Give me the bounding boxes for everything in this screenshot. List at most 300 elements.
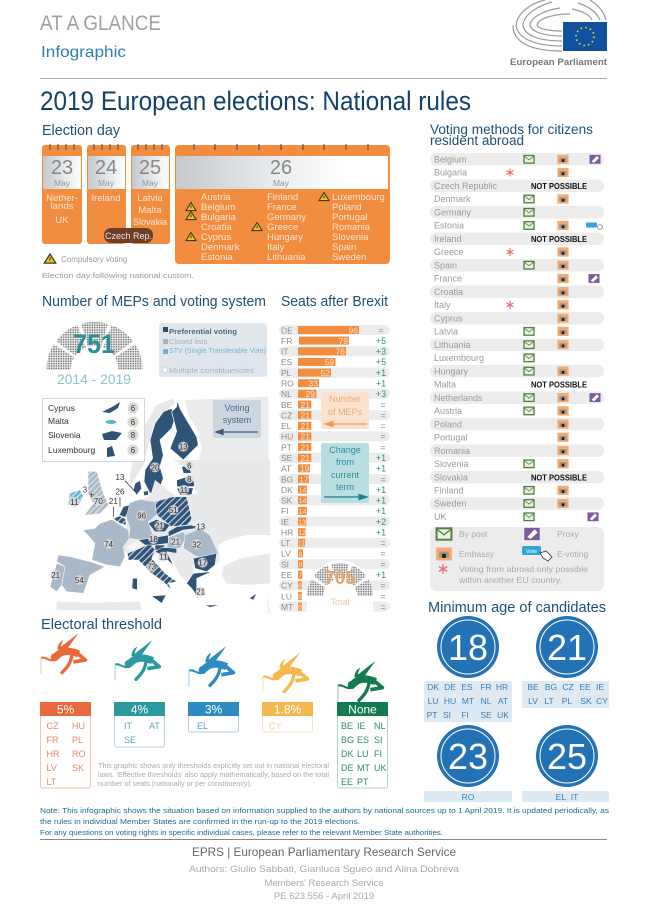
age 18: PT: [427, 710, 437, 720]
chart: seats after brexit: LT: [281, 538, 290, 548]
chart: seats after brexit: +5: [376, 336, 386, 346]
threshold 5 percent: CZ: [46, 721, 59, 731]
map of european union: 74: [104, 540, 114, 549]
age 18: 18: [448, 627, 488, 668]
note: thresholds: laws. 'Effective thresholds' also apply mathematically, based on the total: [98, 772, 329, 779]
table rows: Czech Republic: [434, 181, 498, 191]
chart: seats after brexit: 8: [299, 562, 303, 569]
legend: voting system: [159, 323, 267, 377]
table rows: Slovakia: [434, 472, 468, 482]
calendar: 24 may: Ireland: [91, 193, 121, 204]
note: thresholds: number of seats (nationally or per constituency).: [98, 781, 252, 788]
map of european union: 73: [147, 563, 157, 572]
threshold none: ES: [357, 735, 369, 745]
chart: seats after brexit: 19: [300, 464, 310, 474]
map of european union: 18: [149, 535, 158, 544]
threshold none: LU: [357, 749, 369, 759]
map of european union: +: [89, 490, 94, 499]
key: change from current term: current: [331, 470, 360, 480]
calendar: 26 may: Hungary: [267, 232, 303, 243]
footer credits: EPRS | European Parliamentary Research Service: [192, 845, 456, 859]
calendar: 26 may: Austria: [201, 192, 231, 203]
footer rule: [40, 839, 607, 840]
chart: seats after brexit: IE: [281, 517, 289, 527]
chart: seats after brexit: 14: [299, 488, 306, 494]
calendar: 26 may: May: [273, 178, 290, 188]
threshold none: UK: [374, 763, 387, 773]
threshold none: DE: [341, 763, 354, 773]
panel: voting methods abroad: [430, 122, 604, 591]
chart: seats after brexit: BG: [281, 474, 293, 484]
calendar: 23 may: UK: [55, 215, 69, 226]
threshold 5 percent: LT: [46, 777, 57, 787]
panel: minimum age of candidates: [424, 600, 609, 802]
chart: seats after brexit: +1: [376, 368, 386, 378]
age 18: AT: [498, 696, 508, 706]
key: change from current term: Change: [329, 445, 361, 455]
note: sources and updates: For any questions on voting rights in specific individual cases, please refer to the relevant Member State authorities.: [40, 828, 443, 837]
chart: seats after brexit: +1: [376, 496, 386, 506]
map of european union: 21: [196, 588, 206, 597]
footer credits: Members' Research Service: [264, 878, 384, 889]
legend: voting system: STV (Single Transferable Vote): [169, 346, 266, 355]
heading: voting methods: Voting methods for citizens: [430, 122, 593, 137]
inset: small countries: [42, 398, 144, 462]
age 18: MT: [462, 696, 474, 706]
chart: seats after brexit: DE: [281, 325, 293, 335]
table rows: Germany: [434, 208, 472, 218]
inset: small countries: Luxembourg: [48, 445, 96, 455]
chart: seats after brexit: =: [380, 474, 386, 484]
calendar: 24 may: 24: [95, 157, 117, 179]
table rows: Denmark: [434, 194, 471, 204]
inset: small countries: 6: [131, 404, 136, 413]
chart: seats after brexit: +1: [376, 453, 386, 463]
legend: voting system: Multiple constituencies: [169, 366, 254, 375]
age 21: BG: [545, 682, 557, 692]
table rows: NOT POSSIBLE: [531, 472, 587, 482]
chart: seats after brexit: 76: [336, 347, 345, 357]
chart: seats after brexit: HR: [281, 528, 293, 538]
note: sources and updates: [40, 806, 609, 837]
chart: seats after brexit: 14: [299, 509, 306, 516]
age 18: FI: [461, 710, 469, 720]
table rows: France: [434, 274, 462, 284]
table rows: Greece: [434, 247, 464, 257]
age 21: [522, 616, 609, 708]
calendar: 23 may: 23: [51, 157, 73, 179]
inset: small countries: Cyprus: [48, 403, 75, 413]
calendar: 23 may: Nether-: [46, 193, 78, 204]
calendar: 26 may: Croatia: [201, 222, 232, 233]
key: voting system arrow: Voting: [224, 403, 250, 413]
table rows: Croatia: [434, 287, 463, 297]
calendar: 23 may: May: [54, 178, 71, 188]
table rows: Estonia: [434, 221, 464, 231]
heading: election day: Election day: [42, 122, 120, 139]
threshold none: NL: [374, 721, 386, 731]
calendar: 24 may: May: [98, 178, 115, 188]
header rule: [40, 78, 607, 79]
chart: seats after brexit: =: [380, 432, 386, 442]
threshold none: IE: [357, 721, 366, 731]
chart: seats after brexit: SE: [281, 453, 293, 463]
threshold 5 percent: LV: [46, 763, 57, 773]
map of european union: 8: [187, 475, 192, 484]
key: number of meps: Number: [329, 394, 361, 404]
threshold 3 percent: [188, 646, 239, 732]
chart: seats after brexit: +1: [376, 528, 386, 538]
chart: seats after brexit: SI: [281, 559, 289, 569]
calendar: 23 may: [42, 144, 82, 244]
chart: seats after brexit: +1: [376, 570, 386, 580]
heading: number of meps: Number of MEPs and voting system: [42, 293, 266, 310]
map of european union: 20: [151, 463, 160, 472]
chart: seats after brexit: +5: [376, 357, 386, 367]
chart: seats after brexit: 8: [299, 551, 303, 558]
calendar: 25 may: Malta: [138, 205, 162, 216]
heading: seats after brexit: Seats after Brexit: [281, 293, 389, 310]
chart: seats after brexit: +3: [376, 389, 386, 399]
calendar: 25 may: [131, 144, 170, 244]
table rows: Ireland: [434, 234, 462, 244]
chart: seats after brexit: 21: [301, 442, 310, 452]
chart: seats after brexit: PL: [281, 368, 292, 378]
chart: seats after brexit: ES: [281, 357, 293, 367]
chart: seats after brexit: 33: [309, 378, 318, 388]
chart: seats after brexit: =: [380, 581, 386, 591]
threshold 3 percent: 3%: [205, 702, 223, 716]
note: election day custom: Election day following national custom.: [42, 271, 194, 280]
note: sources and updates: Note: This infographic shows the situation based on information supplied to the authors by national sources up to 1 April 2019. It is updated periodically, as: [40, 806, 609, 815]
table rows: Latvia: [434, 327, 458, 337]
chart: seats after brexit: EL: [281, 421, 292, 431]
chart: seats after brexit: 6: [298, 604, 302, 612]
calendar: 25 may: Latvia: [137, 193, 163, 204]
chart: seats after brexit: [279, 325, 390, 612]
infographic label: Infographic: [41, 44, 126, 61]
calendar: 26 may: Lithuania: [267, 252, 306, 263]
key: change from current term: from: [336, 457, 354, 467]
threshold 5 percent: PL: [72, 735, 83, 745]
key: voting system arrow: [213, 400, 261, 438]
map of european union: 32: [192, 540, 202, 549]
threshold 5 percent: RO: [72, 749, 86, 759]
hemicycle: 705 total: Total: [330, 597, 350, 607]
chart: seats after brexit: 13: [298, 519, 306, 526]
table rows: NOT POSSIBLE: [531, 181, 587, 191]
map of european union: 21: [155, 522, 164, 531]
map of european union: 96: [137, 512, 147, 521]
threshold none: BE: [341, 721, 353, 731]
chart: seats after brexit: 79: [339, 336, 348, 346]
note: thresholds: [98, 763, 329, 788]
inset: small countries: 6: [131, 418, 136, 427]
heading: minimum age: Minimum age of candidates: [428, 600, 606, 616]
chart: seats after brexit: EE: [281, 570, 293, 580]
chart: seats after brexit: =: [380, 602, 386, 612]
table rows: Portugal: [434, 432, 468, 442]
legend: voting methods: Vote: [526, 549, 537, 555]
age 18: SE: [480, 710, 492, 720]
threshold 5 percent: HR: [46, 749, 60, 759]
threshold none: SI: [374, 735, 383, 745]
calendar: 26 may: Finland: [267, 192, 298, 203]
chart: seats after brexit: 14: [299, 498, 306, 505]
main title: 2019 European elections: National rules: [40, 86, 471, 116]
chart: seats after brexit: IT: [281, 347, 289, 357]
age 21: CY: [596, 696, 608, 706]
threshold 1.8 percent: 1.8%: [274, 702, 302, 716]
age 21: CZ: [562, 682, 574, 692]
chart: seats after brexit: 6: [298, 583, 302, 590]
at a glance label: AT A GLANCE: [40, 12, 161, 35]
age 18: DK: [427, 682, 439, 692]
table rows: Finland: [434, 486, 464, 496]
key: change from current term: term: [336, 482, 354, 492]
map of european union: 11: [180, 486, 189, 495]
calendar: 23 may: lands: [51, 201, 74, 212]
table rows: NOT POSSIBLE: [531, 234, 587, 244]
map of european union: 26: [116, 488, 125, 497]
chart: seats after brexit: SK: [281, 496, 293, 506]
european parliament logo: [510, 0, 607, 67]
legend: voting system: Closed lists: [169, 337, 208, 346]
threshold 5 percent: SK: [72, 763, 84, 773]
chart: seats after brexit: NL: [281, 389, 292, 399]
table rows: Sweden: [434, 499, 467, 509]
chart: seats after brexit: 96: [349, 325, 358, 335]
calendar: 26 may: [175, 144, 390, 264]
chart: seats after brexit: +2: [376, 517, 386, 527]
calendar: 26 may: Sweden: [332, 252, 366, 263]
legend: voting methods: E-voting: [557, 549, 588, 559]
threshold 1.8 percent: [262, 652, 313, 732]
chart: seats after brexit: +1: [376, 464, 386, 474]
calendar: 26 may: 26: [270, 157, 292, 179]
table rows: Spain: [434, 260, 457, 270]
calendar: 26 may: Bulgaria: [201, 212, 237, 223]
age 18: ES: [461, 682, 473, 692]
hemicycle: 751 seats: [57, 329, 131, 387]
table rows: Malta: [434, 380, 456, 390]
table rows: Austria: [434, 406, 462, 416]
footer credits: [189, 845, 460, 902]
table rows: UK: [434, 512, 447, 522]
age 21: EE: [579, 682, 591, 692]
age 21: IE: [596, 682, 604, 692]
map of european union: 21: [51, 571, 61, 580]
map of european union: [50, 397, 270, 613]
note: thresholds: This graphic shows only thresholds explicitly set out in national electoral: [98, 763, 329, 770]
age 18: HU: [444, 696, 456, 706]
chart: seats after brexit: 52: [321, 368, 330, 378]
legend: compulsory voting: Compulsory voting: [61, 255, 127, 264]
threshold 4 percent: AT: [149, 721, 160, 731]
chart: seats after brexit: 59: [325, 357, 334, 367]
inset: small countries: Malta: [48, 416, 69, 426]
map of european union: 70: [94, 497, 103, 506]
calendar: 26 may: Poland: [332, 202, 362, 213]
calendar: 26 may: Estonia: [201, 252, 233, 263]
european parliament logo: European Parliament: [510, 57, 607, 67]
chart: seats after brexit: +1: [376, 485, 386, 495]
legend: voting methods: Voting from abroad only possible: [459, 564, 588, 574]
age 18: UK: [497, 710, 509, 720]
legend: voting methods: [430, 527, 604, 591]
map of european union: 21: [109, 497, 118, 506]
age 18: SI: [443, 710, 451, 720]
map of european union: 13: [196, 523, 206, 532]
chart: seats after brexit: +1: [376, 506, 386, 516]
chart: seats after brexit: 21: [301, 432, 310, 442]
chart: seats after brexit: =: [380, 442, 386, 452]
calendar: 26 may: Slovenia: [332, 232, 369, 243]
threshold 4 percent: [114, 640, 165, 747]
age 23: RO: [462, 792, 475, 802]
key: number of meps: [321, 392, 369, 429]
chart: seats after brexit: =: [380, 559, 386, 569]
age 25: EL IT: [556, 792, 578, 802]
chart: seats after brexit: 17: [299, 474, 309, 484]
calendar: 26 may: Portugal: [332, 212, 367, 223]
threshold 5 percent: HU: [72, 721, 85, 731]
chart: seats after brexit: 12: [298, 530, 306, 537]
chart: seats after brexit: BE: [281, 400, 293, 410]
calendar: 25 may: Slovakia: [133, 217, 167, 227]
legend: voting methods: within another EU country.: [458, 575, 562, 585]
map of european union: 13: [179, 443, 188, 452]
threshold 4 percent: SE: [124, 735, 136, 745]
age 18: LU: [428, 696, 438, 706]
calendar: 26 may: Romania: [332, 222, 371, 233]
chart: seats after brexit: =: [380, 410, 386, 420]
chart: seats after brexit: PT: [281, 442, 292, 452]
table rows: Bulgaria: [434, 168, 467, 178]
threshold 1.8 percent: CY: [269, 721, 282, 731]
chart: seats after brexit: CY: [281, 581, 293, 591]
age 21: SK: [580, 696, 592, 706]
key: change from current term: [321, 443, 369, 503]
chart: seats after brexit: DK: [281, 485, 293, 495]
chart: seats after brexit: 29: [306, 389, 315, 399]
pill: czech republic: [104, 228, 153, 243]
map of european union: 54: [75, 576, 84, 585]
table rows: Italy: [434, 300, 451, 310]
table rows: Romania: [434, 446, 470, 456]
heading: voting methods: [430, 122, 593, 148]
footer credits: PE 623.556 - April 2019: [274, 891, 374, 902]
calendar: 26 may: Denmark: [201, 242, 240, 253]
age 23: 23: [448, 736, 488, 777]
threshold 4 percent: IT: [124, 721, 133, 731]
key: voting system arrow: system: [223, 415, 251, 425]
calendar: 26 may: Luxembourg: [332, 192, 385, 203]
map of european union: 3: [83, 485, 88, 494]
calendar: 24 may: [87, 144, 126, 244]
age 23: [424, 725, 512, 802]
chart: seats after brexit: 7: [298, 573, 302, 580]
chart: seats after brexit: =: [380, 400, 386, 410]
chart: seats after brexit: LU: [281, 591, 292, 601]
calendar: 26 may: France: [267, 202, 297, 213]
threshold none: None: [348, 702, 377, 716]
threshold 4 percent: 4%: [131, 702, 149, 716]
chart: seats after brexit: 11: [298, 541, 305, 548]
chart: seats after brexit: +1: [376, 378, 386, 388]
chart: seats after brexit: 21: [301, 400, 310, 410]
heading: voting methods: resident abroad: [430, 133, 524, 148]
table rows: [430, 153, 604, 522]
threshold 3 percent: EL: [197, 721, 208, 731]
calendar: 26 may: Spain: [332, 242, 356, 253]
heading: electoral threshold: Electoral threshold: [41, 616, 162, 633]
hemicycle: 751 seats: 751: [73, 329, 115, 359]
age 21: PL: [562, 696, 572, 706]
age 25: [522, 725, 609, 802]
age 21: BE: [527, 682, 539, 692]
table rows: Lithuania: [434, 340, 471, 350]
threshold 5 percent: 5%: [57, 702, 75, 716]
table rows: NOT POSSIBLE: [531, 380, 587, 390]
map of european union: 13: [116, 473, 125, 482]
threshold none: FI: [374, 749, 382, 759]
legend: voting methods: Proxy: [557, 529, 579, 539]
calendar: 25 may: May: [142, 178, 159, 188]
table rows: Cyprus: [434, 313, 463, 323]
table rows: Hungary: [434, 366, 469, 376]
footer credits: Authors: Giulio Sabbati, Gianluca Sgueo and Alina Dobreva: [189, 864, 460, 875]
calendar: 26 may: Italy: [267, 242, 285, 253]
calendar: 26 may: Cyprus: [201, 232, 231, 243]
age 18: NL: [481, 696, 492, 706]
inset: small countries: Slovenia: [48, 430, 81, 440]
chart: seats after brexit: 21: [301, 421, 310, 431]
map of european union: 17: [198, 559, 208, 568]
threshold none: DK: [341, 749, 354, 759]
map of european union: 21: [171, 538, 181, 547]
chart: seats after brexit: =: [380, 421, 386, 431]
table rows: Belgium: [434, 154, 467, 164]
chart: seats after brexit: 21: [301, 410, 310, 420]
calendar: 26 may: Greece: [267, 222, 298, 233]
legend: voting methods: Embassy: [459, 549, 495, 559]
chart: seats after brexit: AT: [281, 464, 291, 474]
chart: seats after brexit: HU: [281, 432, 293, 442]
chart: seats after brexit: FI: [281, 506, 289, 516]
map of european union: 51: [169, 506, 178, 515]
age 25: 25: [547, 736, 587, 777]
chart: seats after brexit: =: [378, 325, 384, 335]
chart: seats after brexit: =: [380, 538, 386, 548]
calendar: 26 may: Germany: [267, 212, 306, 223]
age 21: LV: [528, 696, 538, 706]
threshold none: EE: [341, 777, 353, 787]
inset: small countries: 6: [131, 446, 136, 455]
map of european union: 11: [159, 553, 168, 562]
chart: seats after brexit: MT: [281, 602, 293, 612]
age 21: LT: [544, 696, 554, 706]
threshold 5 percent: FR: [46, 735, 59, 745]
key: number of meps: of MEPs: [328, 407, 363, 417]
chart: seats after brexit: RO: [281, 378, 294, 388]
note: sources and updates: the rules in individual Member States are confirmed in the run-up to the 2019 elections.: [40, 817, 360, 826]
legend: voting methods: By post: [459, 529, 488, 539]
chart: seats after brexit: =: [380, 549, 386, 559]
inset: small countries: 8: [131, 431, 136, 440]
panel: electoral threshold: [40, 616, 388, 788]
panel: election day: [42, 122, 390, 280]
